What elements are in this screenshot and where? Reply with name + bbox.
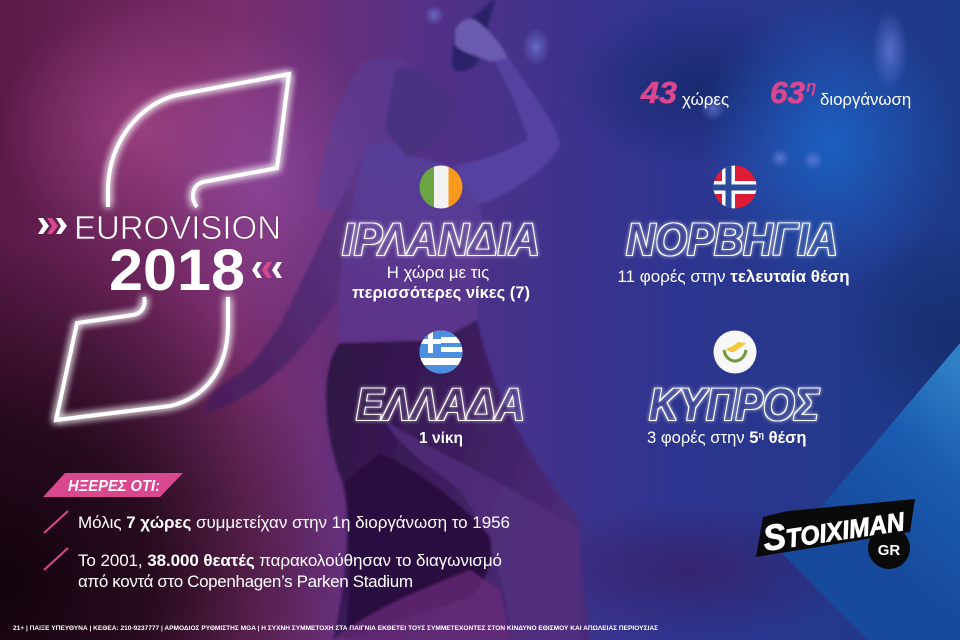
raised arm <box>455 55 560 205</box>
heading: EUROVISION <box>38 209 281 246</box>
name: ΚΥΠΡΟΣ <box>649 379 820 430</box>
description: 3 φορές στην 5 <box>647 428 758 447</box>
did you know badge <box>43 473 183 497</box>
fact 2: από κοντά στο Copenhagen’s Parken Stadium <box>78 572 413 591</box>
country: Ireland: περισσότερες νίκες (7) <box>352 284 530 302</box>
did you know badge: ΗΞΕΡΕΣ ΟΤΙ: <box>68 478 160 495</box>
chevrons right <box>252 262 282 278</box>
torso <box>337 143 482 350</box>
stat: 63rd contest <box>770 75 911 110</box>
fact 2: Το 2001, 38.000 θεατές παρακολούθησαν το διαγωνισμό <box>78 551 502 570</box>
flag: Greece <box>419 330 463 374</box>
fact 1: Μόλις 7 χώρες συμμετείχαν στην 1η διοργάνωση το 1956 <box>78 513 510 532</box>
hand and microphone <box>452 0 495 71</box>
flag: Norway <box>713 165 757 209</box>
stat: 43 countries <box>640 75 729 110</box>
country: Cyprus <box>647 330 820 447</box>
description: θέση <box>764 428 807 447</box>
heading: 2018: 2018 <box>109 238 245 303</box>
singer silhouette <box>203 0 590 640</box>
description: Η χώρα με τις <box>387 263 489 282</box>
flag: Ireland <box>419 165 464 209</box>
left arm and hand <box>203 147 395 412</box>
country: Ireland <box>342 165 540 302</box>
name: ΕΛΛΑΔΑ <box>356 379 525 430</box>
Stoiximan logo: GR <box>878 542 900 559</box>
Stoiximan logo: STOIXIMAN <box>760 497 908 559</box>
EUROVISION text: EUROVISION <box>74 209 281 246</box>
fact 2 <box>44 548 502 591</box>
description: 1 νίκη <box>419 430 463 447</box>
chevrons left <box>38 218 67 234</box>
head <box>385 68 457 158</box>
blue corner triangle <box>782 343 960 640</box>
description: η <box>758 430 764 440</box>
stat: 63rd contest: 63 <box>770 75 805 110</box>
dark thigh <box>343 453 491 640</box>
bullet slash <box>44 511 68 533</box>
bullet slash <box>44 548 68 570</box>
neon S logo <box>56 74 289 420</box>
flag: Cyprus <box>714 330 756 374</box>
stat: 43 countries: 43 <box>640 75 677 110</box>
name: ΙΡΛΑΝΔΙΑ <box>342 214 540 265</box>
stat: 43 countries: χώρες <box>682 90 729 109</box>
stat: 63rd contest: διοργάνωση <box>820 90 911 109</box>
name: ΝΟΡΒΗΓΙΑ <box>626 214 838 265</box>
country: Norway <box>617 165 850 286</box>
description: 11 φορές στην τελευταία θέση <box>617 267 850 286</box>
footer disclaimer: 21+ | ΠΑΙΞΕ ΥΠΕΥΘΥΝΑ | ΚΕΘΕΑ: 210-9237777 | ΑΡΜΟΔΙΟΣ ΡΥΘΜΙΣΤΗΣ MGA | Η ΣΥΧΝΗ ΣΥΜΜΕΤΟΧΗ ΣΤΑ ΠΑΙΓΝΙΑ ΕΚΘΕΤΕΙ ΤΟΥΣ ΣΥΜΜΕΤΕΧΟΝΤΕΣ ΣΤΟΝ ΚΙΝΔΥΝΟ ΕΘΙΣΜΟΥ ΚΑΙ ΑΠΩΛΕΙΑΣ ΠΕΡΙΟΥΣΙΑΣ <box>13 625 658 632</box>
lower body and dress <box>326 320 590 640</box>
stat: 63rd contest: η <box>806 77 816 96</box>
country: Greece <box>356 330 525 447</box>
hair <box>317 58 440 215</box>
